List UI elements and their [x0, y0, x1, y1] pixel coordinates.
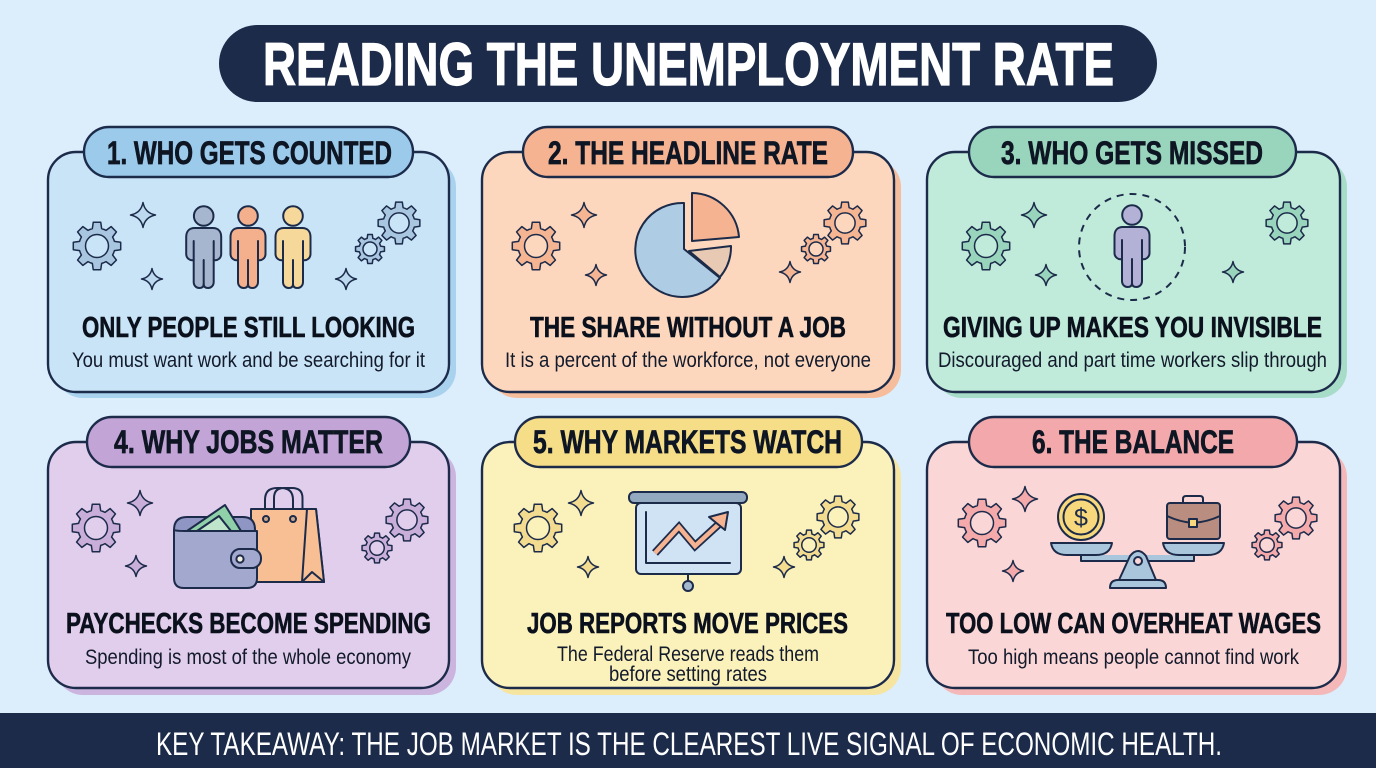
panel 3 description: Discouraged and part time workers slip through	[938, 348, 1327, 372]
panel: 2 the headline rate	[482, 127, 901, 398]
icon: gears and sparkles	[958, 486, 1317, 582]
panel: 5 why markets watch	[482, 417, 901, 695]
panel 1 heading: ONLY PEOPLE STILL LOOKING	[82, 312, 415, 344]
panel 4 heading: PAYCHECKS BECOME SPENDING	[66, 608, 431, 640]
heading tab 5	[515, 417, 862, 467]
heading tab 2: 2. THE HEADLINE RATE	[548, 135, 828, 171]
icon: gears and sparkles	[962, 202, 1308, 286]
title banner: READING THE UNEMPLOYMENT RATE	[263, 31, 1114, 98]
heading tab 4: 4. WHY JOBS MATTER	[114, 424, 383, 460]
panel: 4 why jobs matter	[48, 417, 456, 695]
icon: pie chart	[635, 193, 739, 297]
icon: person in dashed circle	[1079, 194, 1185, 300]
title banner	[219, 25, 1157, 102]
panel 6 description: Too high means people cannot find work	[968, 645, 1299, 669]
panel 2 heading: THE SHARE WITHOUT A JOB	[530, 312, 846, 344]
panel: 1 who gets counted	[48, 127, 456, 398]
panel 5 description: before setting rates	[609, 662, 767, 686]
icon: balance scale with coin and briefcase: $	[1074, 504, 1088, 532]
icon: three people	[186, 206, 310, 288]
panel: 6 the balance	[927, 417, 1347, 695]
heading tab 6: 6. THE BALANCE	[1032, 424, 1234, 460]
heading tab 2	[523, 127, 853, 177]
panel 5 heading: JOB REPORTS MOVE PRICES	[527, 608, 848, 640]
icon: gears and sparkles	[72, 490, 428, 576]
panel 5 description	[557, 642, 819, 686]
heading tab 1	[84, 127, 413, 177]
heading tab 6	[969, 417, 1297, 467]
panel 1 description: You must want work and be searching for it	[72, 348, 425, 372]
icon: wallet and shopping bag	[174, 488, 324, 588]
icon: gears and sparkles	[73, 202, 420, 290]
icon: gears and sparkles	[512, 202, 866, 286]
heading tab 4	[87, 417, 410, 467]
heading tab 3: 3. WHO GETS MISSED	[1001, 135, 1263, 171]
panel 5 description: The Federal Reserve reads them	[557, 642, 819, 666]
icon: presentation board with rising arrow	[629, 492, 747, 591]
panel: 3 who gets missed	[927, 127, 1347, 398]
heading tab 5: 5. WHY MARKETS WATCH	[533, 424, 842, 460]
panel 4 description: Spending is most of the whole economy	[85, 645, 411, 669]
icon: balance scale with coin and briefcase	[1051, 494, 1224, 588]
footer: key takeaway	[0, 713, 1376, 768]
icon: gears and sparkles	[514, 490, 859, 578]
heading tab 1: 1. WHO GETS COUNTED	[107, 135, 392, 171]
panel 2 description: It is a percent of the workforce, not everyone	[505, 348, 871, 372]
heading tab 3	[969, 127, 1296, 177]
